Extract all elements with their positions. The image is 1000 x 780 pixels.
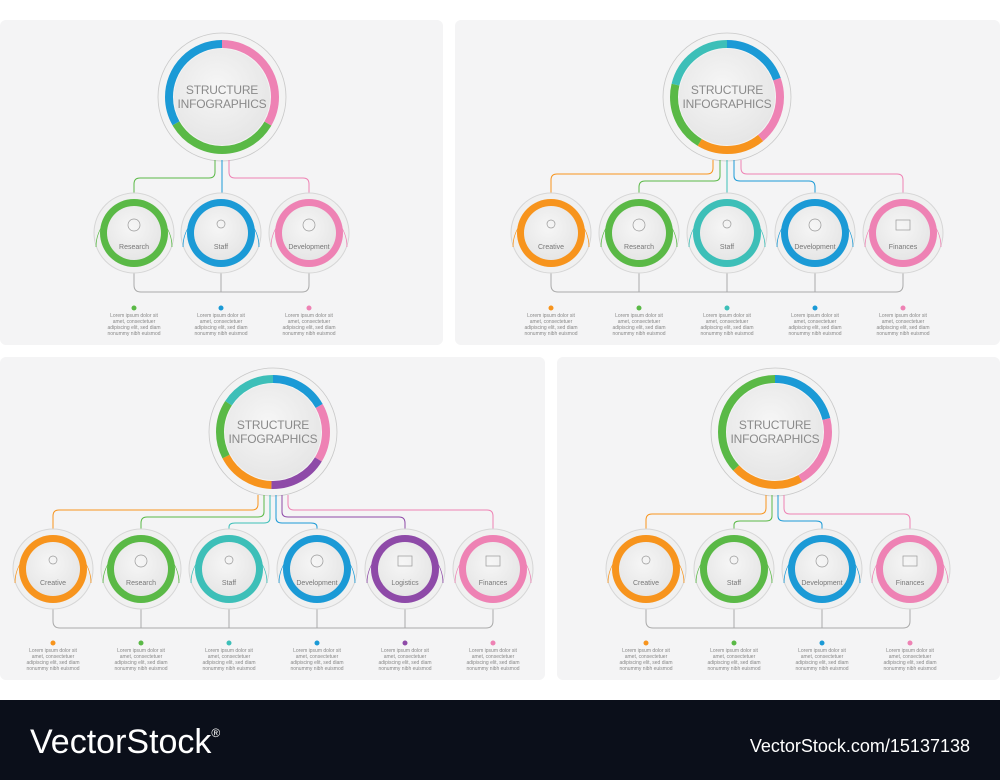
footer bar [0, 700, 1000, 780]
descriptions: nonummy nibh euismod [524, 331, 578, 337]
descriptions: adipiscing elit, sed diam [202, 660, 256, 666]
descriptions: adipiscing elit, sed diam [619, 660, 673, 666]
descriptions: Lorem ipsum dolor sit [29, 648, 78, 654]
panel: 3 items [0, 20, 443, 345]
node: Finances: Finances [479, 580, 508, 587]
node: Development: Development [288, 244, 330, 251]
descriptions: nonummy nibh euismod [378, 666, 432, 672]
connectors [551, 160, 903, 292]
descriptions: adipiscing elit, sed diam [788, 325, 842, 331]
connectors [134, 160, 309, 292]
node: Staff: Staff [222, 580, 236, 587]
node: Development [277, 529, 357, 609]
node: Staff [181, 193, 261, 273]
descriptions: Lorem ipsum dolor sit [293, 648, 342, 654]
node: Staff [694, 529, 774, 609]
descriptions: adipiscing elit, sed diam [883, 660, 937, 666]
connectors [646, 495, 910, 628]
node: Finances: Finances [889, 244, 918, 251]
footer bar: ® [211, 726, 220, 740]
descriptions: nonummy nibh euismod [194, 331, 248, 337]
descriptions: Lorem ipsum dolor sit [197, 313, 246, 319]
node: Research [599, 193, 679, 273]
descriptions: adipiscing elit, sed diam [707, 660, 761, 666]
descriptions: nonummy nibh euismod [26, 666, 80, 672]
main circle: INFOGRAPHICS [229, 432, 318, 446]
descriptions: nonummy nibh euismod [612, 331, 666, 337]
descriptions [26, 640, 520, 672]
main circle: STRUCTURE [237, 418, 309, 432]
descriptions [619, 640, 937, 672]
descriptions: nonummy nibh euismod [700, 331, 754, 337]
descriptions: amet, consectetuer [801, 654, 844, 660]
main circle: STRUCTURE [739, 418, 811, 432]
descriptions: adipiscing elit, sed diam [194, 325, 248, 331]
descriptions: amet, consectetuer [113, 319, 156, 325]
node: Development: Development [296, 580, 338, 587]
node: Logistics [365, 529, 445, 609]
node: Research [94, 193, 174, 273]
node: Creative [606, 529, 686, 609]
descriptions: Lorem ipsum dolor sit [527, 313, 576, 319]
node: Development [775, 193, 855, 273]
descriptions: nonummy nibh euismod [883, 666, 937, 672]
node: Creative: Creative [633, 580, 659, 587]
descriptions: nonummy nibh euismod [114, 666, 168, 672]
descriptions: Lorem ipsum dolor sit [710, 648, 759, 654]
descriptions: Lorem ipsum dolor sit [117, 648, 166, 654]
panel: 5 items [455, 20, 1000, 345]
descriptions: adipiscing elit, sed diam [795, 660, 849, 666]
descriptions: adipiscing elit, sed diam [876, 325, 930, 331]
descriptions: Lorem ipsum dolor sit [205, 648, 254, 654]
node: Staff: Staff [720, 244, 734, 251]
footer bar: VectorStock [30, 723, 211, 761]
descriptions: amet, consectetuer [120, 654, 163, 660]
descriptions: Lorem ipsum dolor sit [110, 313, 159, 319]
descriptions: amet, consectetuer [472, 654, 515, 660]
descriptions: nonummy nibh euismod [619, 666, 673, 672]
descriptions: Lorem ipsum dolor sit [886, 648, 935, 654]
descriptions: nonummy nibh euismod [795, 666, 849, 672]
descriptions: amet, consectetuer [706, 319, 749, 325]
main circle: STRUCTURE [186, 83, 258, 97]
descriptions: nonummy nibh euismod [282, 331, 336, 337]
descriptions: adipiscing elit, sed diam [107, 325, 161, 331]
descriptions: Lorem ipsum dolor sit [791, 313, 840, 319]
descriptions: adipiscing elit, sed diam [612, 325, 666, 331]
descriptions: amet, consectetuer [32, 654, 75, 660]
descriptions: Lorem ipsum dolor sit [469, 648, 518, 654]
descriptions: Lorem ipsum dolor sit [622, 648, 671, 654]
main circle: INFOGRAPHICS [731, 432, 820, 446]
node: Creative: Creative [538, 244, 564, 251]
node: Creative [511, 193, 591, 273]
descriptions: Lorem ipsum dolor sit [798, 648, 847, 654]
descriptions: nonummy nibh euismod [707, 666, 761, 672]
main circle [711, 368, 839, 496]
connectors [53, 495, 493, 628]
descriptions: nonummy nibh euismod [290, 666, 344, 672]
descriptions: amet, consectetuer [530, 319, 573, 325]
node: Creative: Creative [40, 580, 66, 587]
panel: 4 items [557, 357, 1000, 680]
node: Staff: Staff [214, 244, 228, 251]
main circle: STRUCTURE [691, 83, 763, 97]
descriptions: amet, consectetuer [208, 654, 251, 660]
descriptions: Lorem ipsum dolor sit [285, 313, 334, 319]
node: Finances: Finances [896, 580, 925, 587]
node: Finances [870, 529, 950, 609]
descriptions: amet, consectetuer [296, 654, 339, 660]
node: Development [782, 529, 862, 609]
descriptions: adipiscing elit, sed diam [466, 660, 520, 666]
node: Creative [13, 529, 93, 609]
descriptions: adipiscing elit, sed diam [26, 660, 80, 666]
descriptions: adipiscing elit, sed diam [282, 325, 336, 331]
node: Logistics: Logistics [391, 580, 419, 587]
descriptions: nonummy nibh euismod [788, 331, 842, 337]
node: Staff [189, 529, 269, 609]
node: Research: Research [126, 580, 156, 587]
descriptions: adipiscing elit, sed diam [700, 325, 754, 331]
descriptions: amet, consectetuer [794, 319, 837, 325]
node: Development: Development [801, 580, 843, 587]
descriptions: nonummy nibh euismod [107, 331, 161, 337]
main circle: INFOGRAPHICS [683, 97, 772, 111]
node: Finances [453, 529, 533, 609]
main circle [158, 33, 286, 161]
descriptions: adipiscing elit, sed diam [524, 325, 578, 331]
node: Research [101, 529, 181, 609]
descriptions [107, 306, 336, 337]
descriptions: amet, consectetuer [889, 654, 932, 660]
descriptions: amet, consectetuer [713, 654, 756, 660]
descriptions: Lorem ipsum dolor sit [615, 313, 664, 319]
main circle [663, 33, 791, 161]
node: Staff: Staff [727, 580, 741, 587]
node: Development [269, 193, 349, 273]
descriptions: adipiscing elit, sed diam [290, 660, 344, 666]
descriptions: Lorem ipsum dolor sit [381, 648, 430, 654]
node: Research: Research [119, 244, 149, 251]
descriptions [524, 306, 930, 337]
descriptions: amet, consectetuer [882, 319, 925, 325]
node: Staff [687, 193, 767, 273]
descriptions: amet, consectetuer [384, 654, 427, 660]
descriptions: amet, consectetuer [618, 319, 661, 325]
descriptions: Lorem ipsum dolor sit [703, 313, 752, 319]
descriptions: amet, consectetuer [288, 319, 331, 325]
node: Development: Development [794, 244, 836, 251]
main circle [209, 368, 337, 496]
descriptions: nonummy nibh euismod [202, 666, 256, 672]
panel: 6 items [0, 357, 545, 680]
footer bar: VectorStock.com/15137138 [750, 736, 970, 756]
descriptions: adipiscing elit, sed diam [114, 660, 168, 666]
descriptions: Lorem ipsum dolor sit [879, 313, 928, 319]
node: Finances [863, 193, 943, 273]
main circle: INFOGRAPHICS [178, 97, 267, 111]
descriptions: nonummy nibh euismod [466, 666, 520, 672]
descriptions: nonummy nibh euismod [876, 331, 930, 337]
descriptions: amet, consectetuer [625, 654, 668, 660]
descriptions: amet, consectetuer [200, 319, 243, 325]
descriptions: adipiscing elit, sed diam [378, 660, 432, 666]
node: Research: Research [624, 244, 654, 251]
